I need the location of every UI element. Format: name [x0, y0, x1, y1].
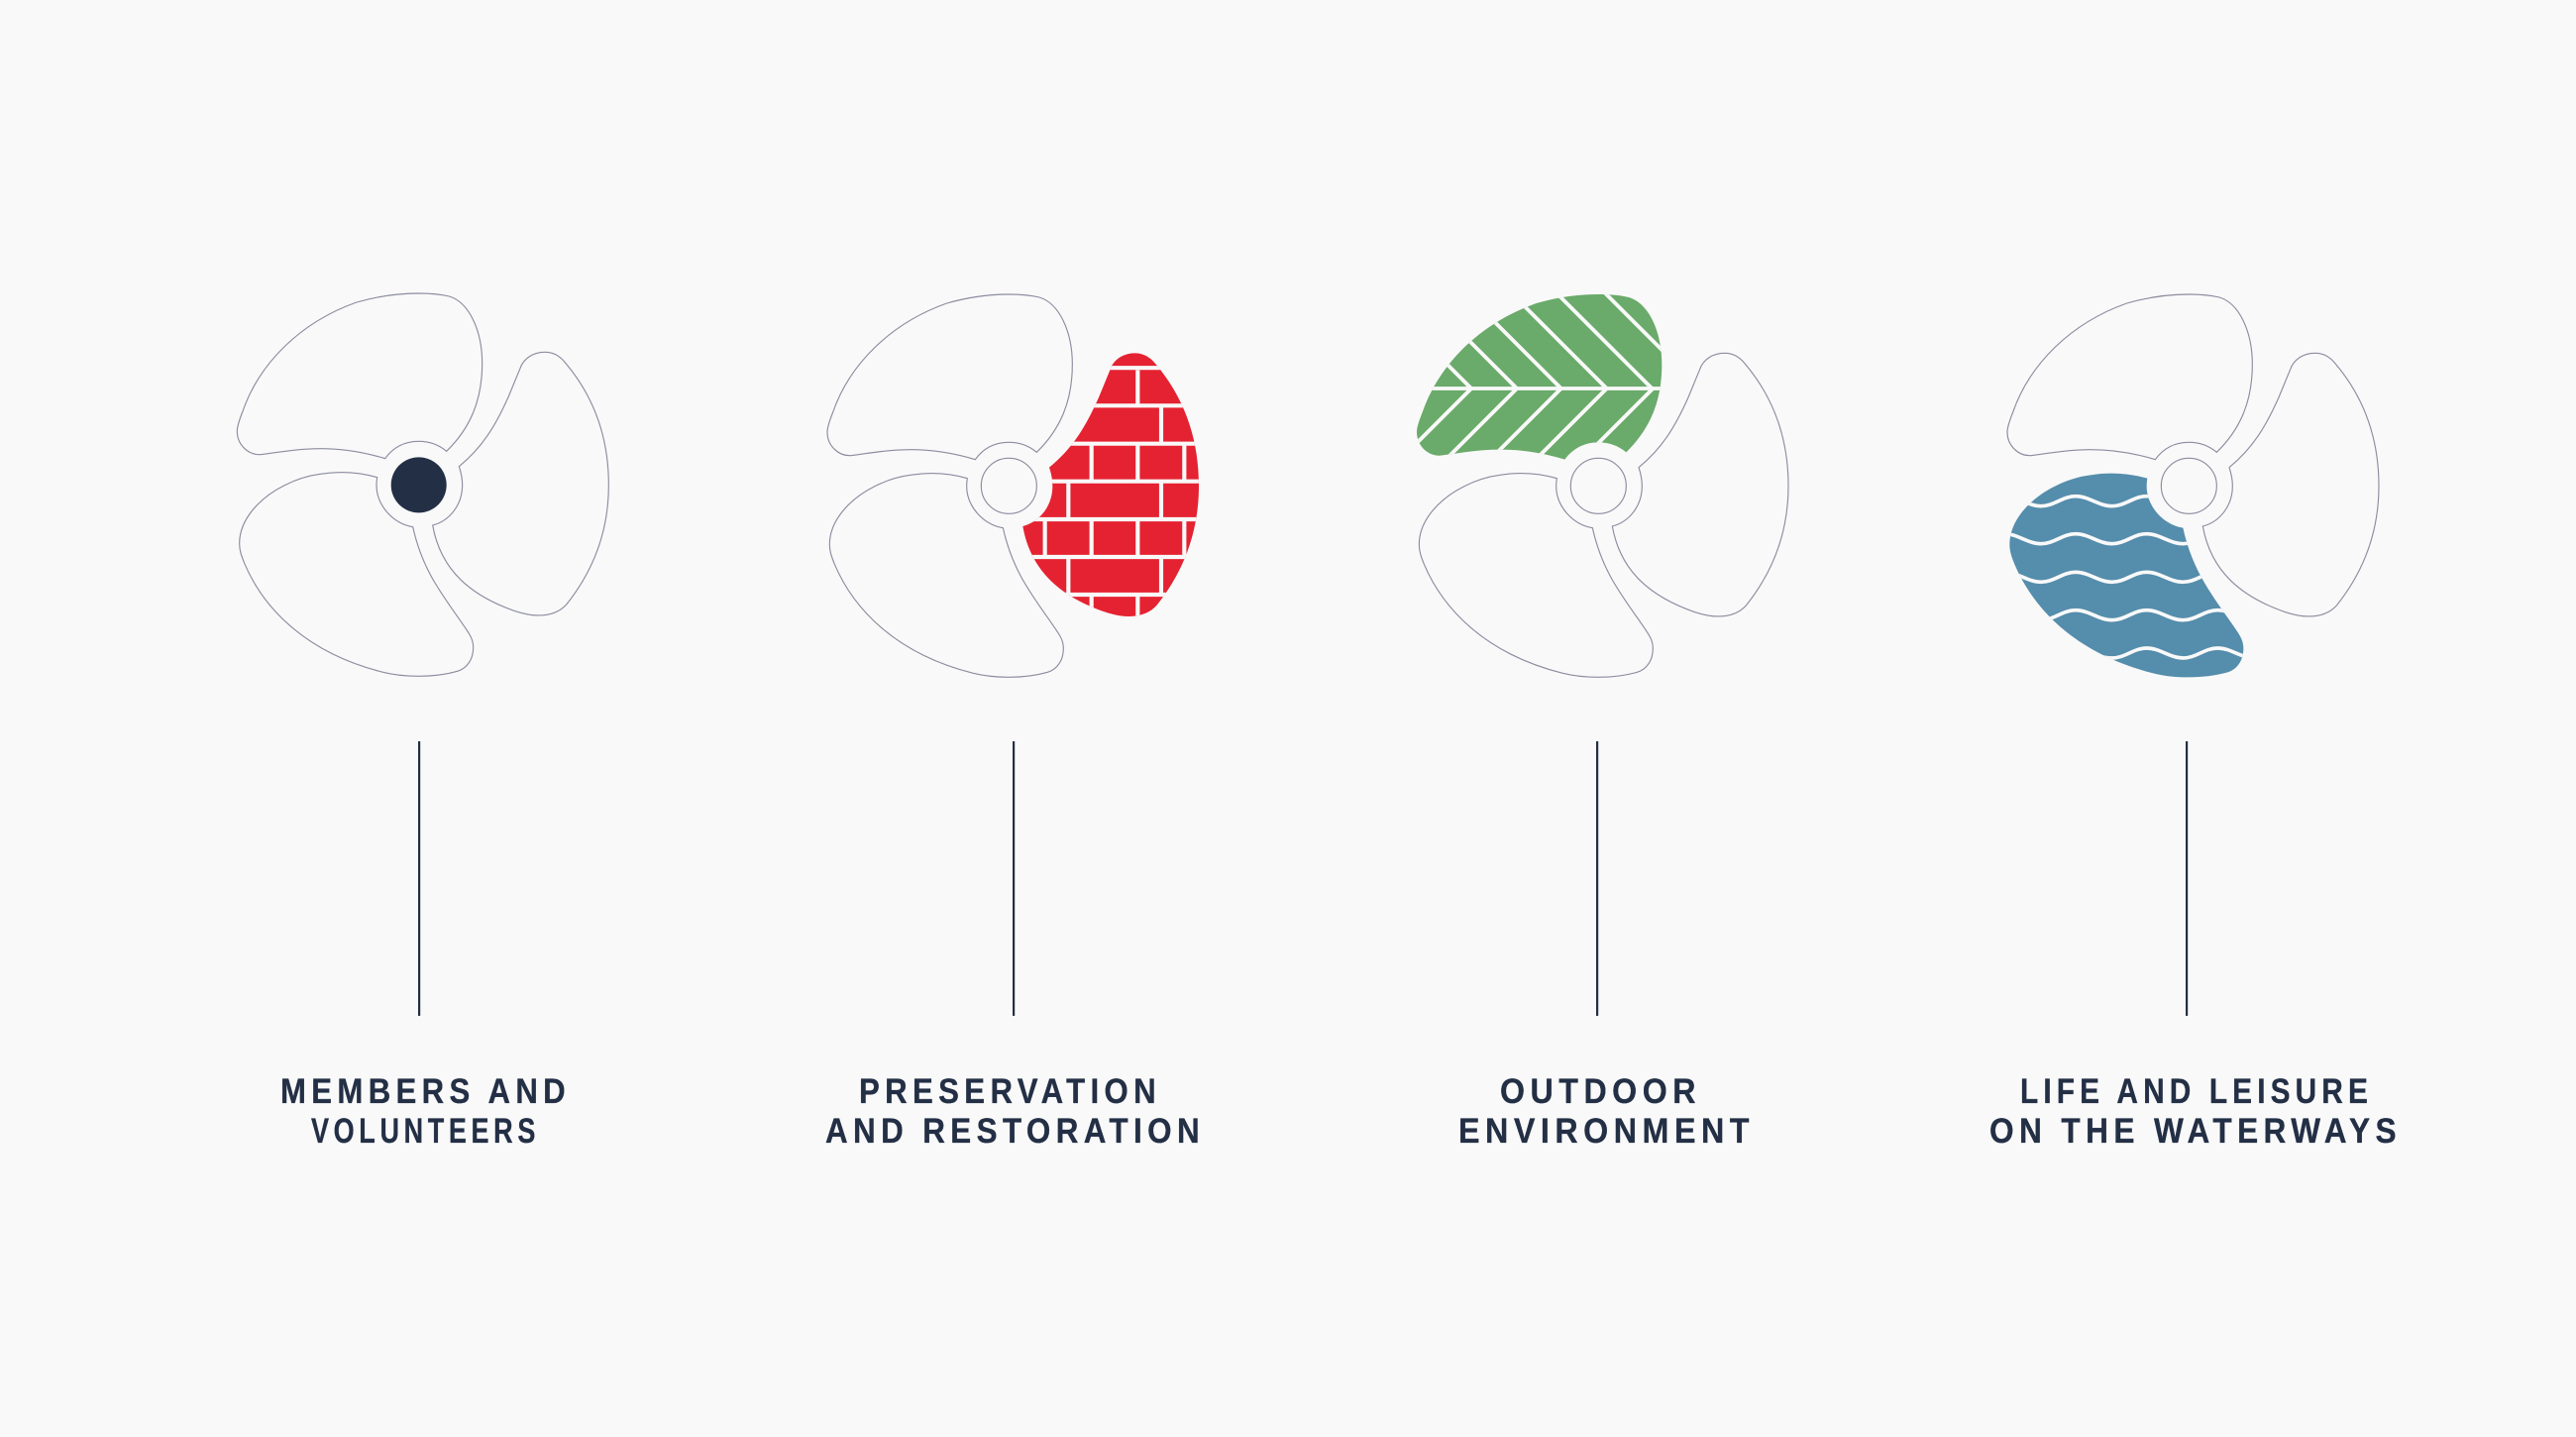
- red brick blade: [1022, 353, 1199, 616]
- bottom blade outline: [829, 474, 1063, 677]
- top blade outline: [237, 293, 483, 459]
- label: outdoor environment: ENVIRONMENT: [1458, 1112, 1755, 1151]
- label: members and volunteers: MEMBERS AND: [280, 1072, 571, 1111]
- green leaf blade: [1417, 294, 1663, 460]
- right blade outline: [433, 352, 608, 615]
- hub outline: [1570, 458, 1626, 513]
- right blade outline: [1612, 353, 1788, 616]
- propeller: life and leisure on the waterways: [2004, 294, 2379, 677]
- propeller: outdoor environment: [1405, 289, 1788, 677]
- connector line 4: [2186, 741, 2188, 1016]
- hub outline: [981, 458, 1036, 513]
- label: members and volunteers: [280, 1072, 571, 1151]
- top blade outline: [827, 294, 1072, 460]
- label: members and volunteers: VOLUNTEERS: [311, 1112, 540, 1151]
- blue water blade: [2004, 474, 2254, 677]
- hub outline: [2161, 458, 2216, 513]
- label: preservation and restoration: AND RESTORATION: [825, 1112, 1205, 1151]
- label: outdoor environment: [1458, 1072, 1755, 1151]
- filled navy hub: [391, 457, 447, 512]
- connector line 3: [1596, 741, 1598, 1016]
- bottom blade outline: [240, 473, 474, 676]
- propeller: preservation and restoration: [827, 294, 1218, 677]
- connector line 1: [418, 741, 420, 1016]
- label: life and leisure on the waterways: [1989, 1072, 2402, 1151]
- connector line 2: [1013, 741, 1015, 1016]
- label: preservation and restoration: [825, 1072, 1205, 1151]
- right blade outline: [2202, 353, 2379, 616]
- label: preservation and restoration: PRESERVATION: [859, 1072, 1161, 1111]
- label: life and leisure on the waterways: LIFE AND LEISURE: [2020, 1072, 2373, 1111]
- top blade outline: [2007, 294, 2252, 460]
- bottom blade outline: [1419, 474, 1653, 677]
- label: life and leisure on the waterways: ON THE WATERWAYS: [1989, 1112, 2402, 1151]
- propeller: members and volunteers: [237, 293, 608, 676]
- label: outdoor environment: OUTDOOR: [1500, 1072, 1701, 1111]
